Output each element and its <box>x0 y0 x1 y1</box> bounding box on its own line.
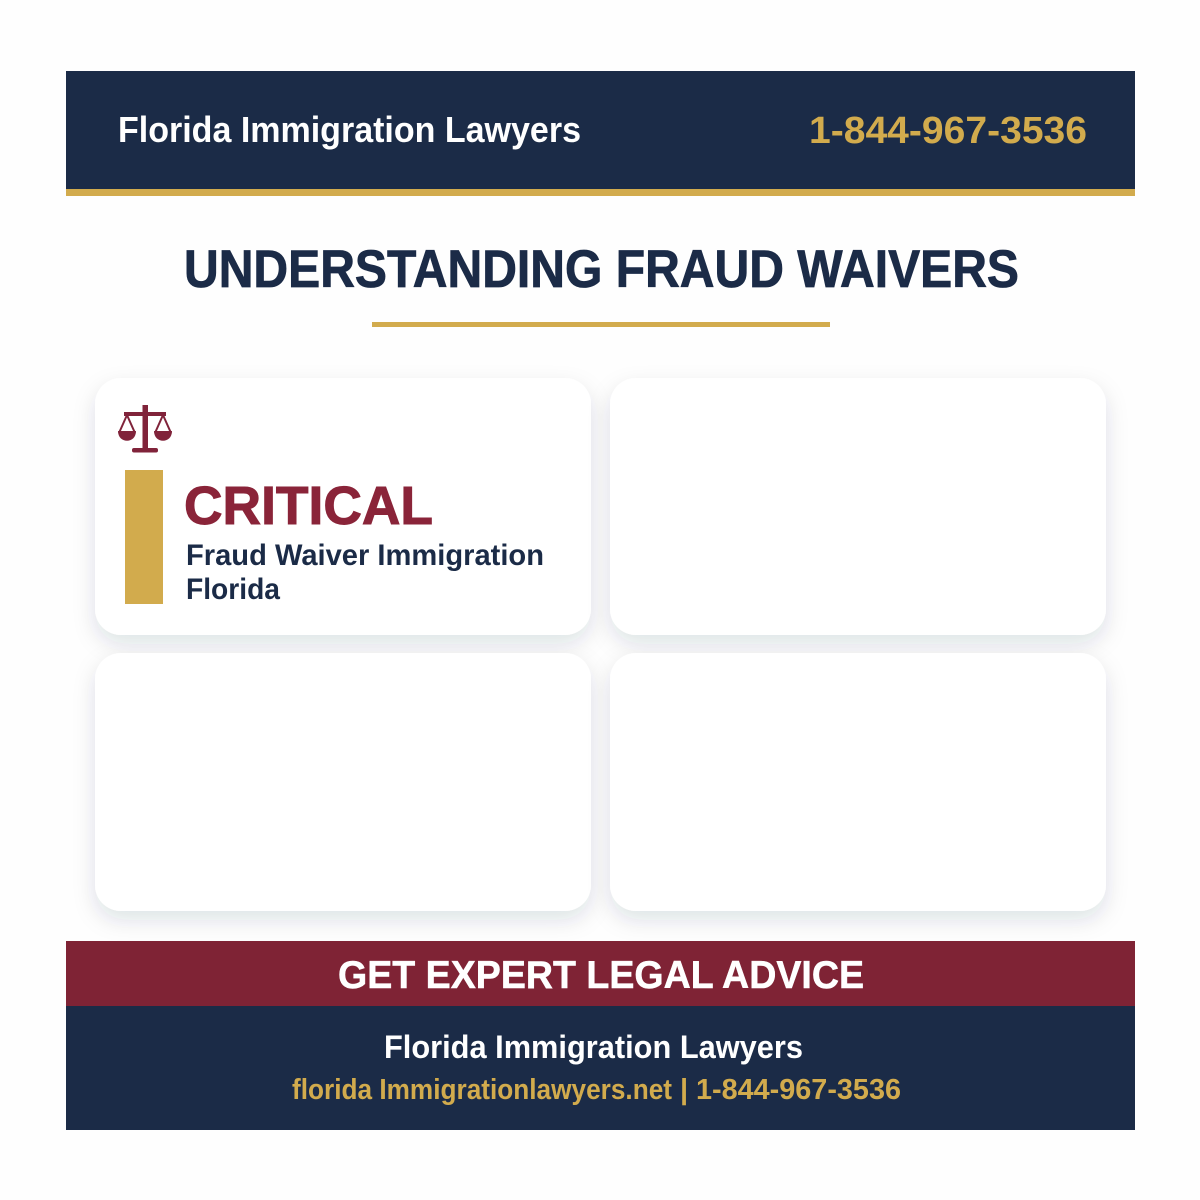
panel description: Florida <box>186 573 280 606</box>
panel: empty top right <box>610 378 1106 635</box>
panel description: Fraud Waiver Immigration <box>186 539 544 572</box>
header firm name: Florida Immigration Lawyers <box>118 109 581 150</box>
panel: empty bottom left <box>95 653 591 911</box>
header phone number: 1-844-967-3536 <box>809 110 1087 152</box>
critical label: CRITICAL <box>184 476 433 536</box>
panel: empty bottom right <box>610 653 1106 911</box>
footer website and phone: 1-844-967-3536 <box>696 1074 901 1106</box>
gold accent bar <box>125 470 163 604</box>
footer website and phone <box>292 1074 901 1106</box>
footer firm name: Florida Immigration Lawyers <box>384 1029 803 1065</box>
footer band <box>66 1006 1135 1130</box>
header band <box>66 71 1135 196</box>
footer website and phone: florida Immigrationlawyers.net <box>292 1074 672 1106</box>
icon: scales of justice <box>118 405 172 452</box>
call to action text: GET EXPERT LEGAL ADVICE <box>338 954 864 997</box>
title: UNDERSTANDING FRAUD WAIVERS <box>184 240 1019 299</box>
title underline <box>372 322 830 327</box>
panel: critical <box>95 378 591 635</box>
panel description <box>186 539 544 606</box>
footer website and phone: | <box>680 1074 688 1106</box>
call to action band <box>66 941 1135 1006</box>
